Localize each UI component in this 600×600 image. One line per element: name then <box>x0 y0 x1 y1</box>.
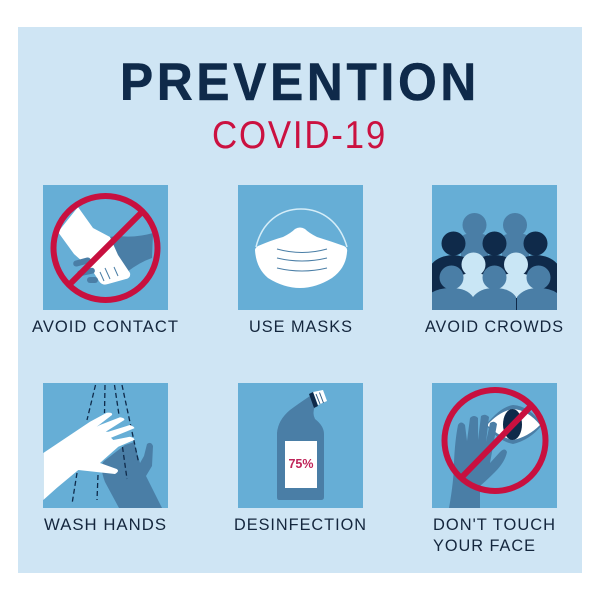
panel: avoid crowds <box>424 185 564 336</box>
label: AVOID CROWDS <box>425 318 564 336</box>
front row people <box>432 266 557 310</box>
icon: crowd <box>432 213 557 310</box>
icon: dark arm <box>88 233 153 272</box>
title: PREVENTION <box>120 53 480 112</box>
icon: bottle brush <box>309 390 327 408</box>
icon: dark hand <box>102 442 162 508</box>
label: USE MASKS <box>249 318 353 336</box>
panel: desinfection <box>234 383 367 534</box>
panel: don't touch your face <box>432 383 557 555</box>
back row people <box>461 213 529 258</box>
icon: finger lines <box>100 267 118 281</box>
icon: bottle body <box>277 396 324 500</box>
icon: white arm and hand <box>58 207 130 285</box>
dark row people <box>428 232 561 312</box>
icon: mask strap <box>256 209 347 247</box>
panel: avoid contact <box>32 185 179 336</box>
subtitle: COVID-19 <box>212 114 387 157</box>
label: DON'T TOUCH <box>433 516 556 534</box>
icon: mask body <box>255 228 347 288</box>
icon: prohibition sign <box>54 196 158 300</box>
label <box>433 516 556 555</box>
icon: mask pleats <box>277 249 327 271</box>
icon: prohibition sign <box>444 390 546 491</box>
icon: dark fingers <box>73 257 98 283</box>
label: AVOID CONTACT <box>32 318 179 336</box>
percentage: 75% <box>288 457 314 471</box>
light row people <box>455 252 536 298</box>
label: WASH HANDS <box>44 516 167 534</box>
panel: use masks <box>238 185 363 336</box>
icon: white hand <box>43 413 134 500</box>
icon: eye <box>486 405 542 444</box>
panel: wash hands <box>43 383 168 534</box>
icon: hand <box>449 415 507 508</box>
label: DESINFECTION <box>234 516 367 534</box>
label: YOUR FACE <box>433 537 536 555</box>
icon: water drops <box>72 385 138 504</box>
icon: bottle label <box>285 441 317 488</box>
